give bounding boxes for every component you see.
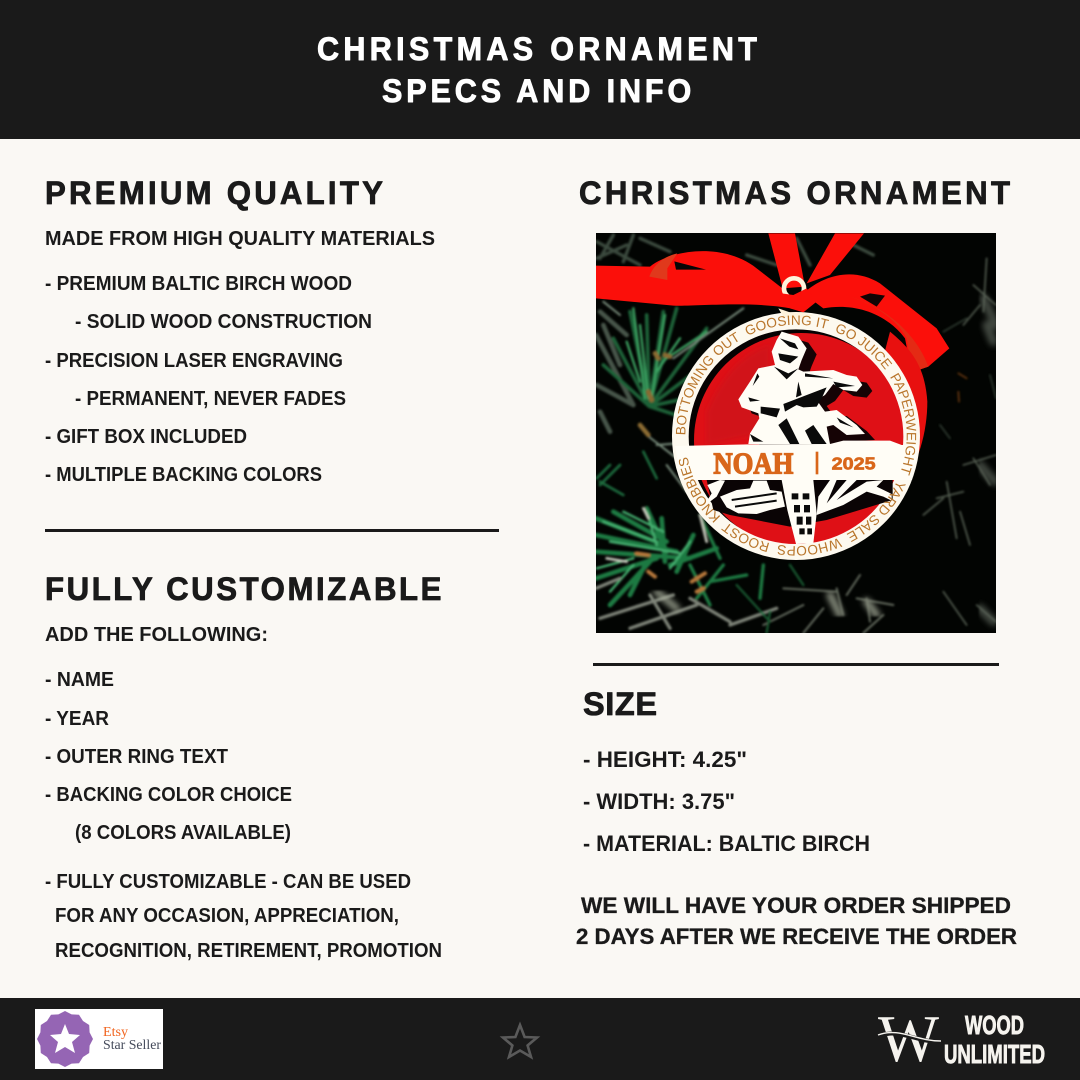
callout: shipping note: 2 DAYS AFTER WE RECEIVE THE ORDER — [576, 924, 1017, 949]
heading: premium quality: PREMIUM QUALITY — [45, 174, 383, 211]
pine needles, bottom centre — [657, 565, 893, 633]
rider silhouette — [738, 332, 865, 444]
heading: size: SIZE — [583, 686, 657, 722]
callout: shipping note — [576, 893, 1017, 949]
text block: materials list: - PREMIUM BALTIC BIRCH WOOD — [45, 273, 352, 295]
heading: fully customizable: FULLY CUSTOMIZABLE — [45, 570, 441, 607]
text block: size specs: - WIDTH: 3.75" — [583, 789, 735, 814]
rider and motorbike cut-out — [675, 332, 918, 544]
text block: materials list: - SOLID WOOD CONSTRUCTION — [75, 311, 372, 333]
text block: customization list: - YEAR — [45, 708, 110, 730]
rider shadow — [748, 338, 875, 449]
pine needles, right side — [923, 258, 996, 625]
red backing disc — [688, 328, 927, 548]
text block: customization list: - NAME — [45, 669, 114, 691]
text block: size specs: - HEIGHT: 4.25" — [583, 747, 747, 772]
text block: customization list: - FULLY CUSTOMIZABLE - CAN BE USED — [45, 871, 411, 893]
pine needles, upper left — [596, 235, 873, 495]
panel: fully customizable — [45, 570, 442, 962]
badge: etsy star seller — [35, 1009, 163, 1069]
text block: materials list: - GIFT BOX INCLUDED — [45, 426, 247, 448]
text block: materials list: - MULTIPLE BACKING COLORS — [45, 464, 322, 486]
header band — [0, 0, 1080, 139]
text block: materials list: - PERMANENT, NEVER FADES — [75, 388, 346, 410]
motorbike left fragment — [703, 480, 785, 514]
text block: customization list: - OUTER RING TEXT — [45, 746, 228, 768]
text block: customization list: FOR ANY OCCASION, APPRECIATION, — [55, 905, 399, 927]
logo: wood unlimited: WOOD — [965, 1010, 1024, 1040]
logo: wood unlimited — [878, 1002, 1045, 1076]
text block: materials list: MADE FROM HIGH QUALITY MATERIALS — [45, 228, 435, 250]
text block: customization list: (8 COLORS AVAILABLE) — [75, 822, 291, 844]
text block: customization list: RECOGNITION, RETIREMENT, PROMOTION — [55, 940, 442, 962]
heading: christmas ornament: CHRISTMAS ORNAMENT — [579, 174, 1011, 211]
motorbike tyre — [782, 480, 817, 544]
banner name and year — [713, 446, 876, 480]
underside shadow — [707, 480, 893, 527]
badge: etsy star seller: Star Seller — [103, 1038, 161, 1053]
text block: size specs — [583, 747, 870, 856]
photo: ornament on pine branches — [596, 233, 996, 633]
panel: premium quality — [45, 174, 435, 486]
name banner — [675, 441, 918, 480]
icon: outlined star — [503, 1025, 537, 1057]
rider details — [748, 338, 855, 444]
icon: purple badge with star — [37, 1011, 93, 1067]
text block: size specs: - MATERIAL: BALTIC BIRCH — [583, 831, 870, 856]
footer band — [0, 998, 1080, 1080]
banner name and year: NOAH — [713, 446, 793, 480]
title: SPECS AND INFO — [382, 72, 691, 109]
logo: wood unlimited: W — [878, 1002, 940, 1076]
motorbike right fragment — [817, 480, 892, 515]
text block: customization list: - BACKING COLOR CHOICE — [45, 784, 292, 806]
banner name and year: 2025 — [832, 453, 876, 473]
badge: etsy star seller: Etsy — [103, 1025, 128, 1040]
panel: size — [583, 686, 870, 856]
text block: customization list — [45, 624, 442, 962]
wood ring — [672, 278, 920, 560]
text block: customization list: ADD THE FOLLOWING: — [45, 624, 268, 646]
ribbon — [596, 233, 949, 372]
pine needles, lower left — [596, 508, 777, 628]
title: CHRISTMAS ORNAMENT — [317, 30, 757, 67]
title — [317, 30, 757, 109]
text block: materials list — [45, 228, 435, 486]
text block: materials list: - PRECISION LASER ENGRAVING — [45, 350, 343, 372]
ring engraved text: BOTTOMING OUT GOOSING IT GO JUICE PAPERWEIGHT YARD SALE WHOOPS ROOST KNOBBIES — [676, 316, 916, 556]
callout: shipping note: WE WILL HAVE YOUR ORDER SHIPPED — [581, 893, 1011, 918]
